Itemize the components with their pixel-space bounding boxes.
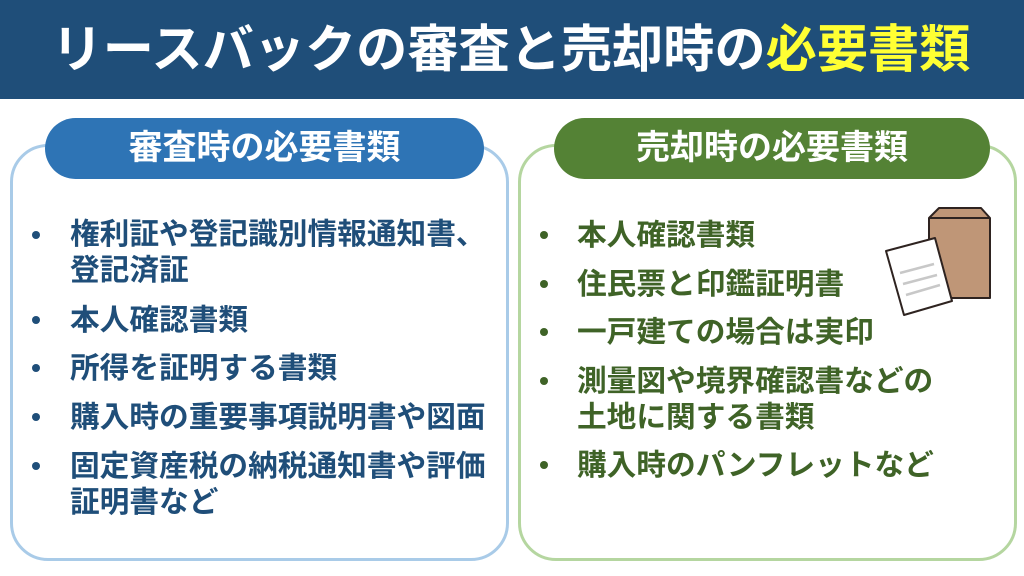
bullet item 5 (540, 461, 548, 469)
item 5 text: 購入時のパンフレットなど (577, 449, 934, 482)
bullet item 4 (32, 413, 40, 421)
heading: sale documents (554, 118, 990, 179)
item 4 continuation: 土地に関する書類 (577, 401, 814, 434)
item 3 text: 一戸建ての場合は実印 (577, 316, 874, 349)
item 1 continuation: 登記済証 (70, 254, 189, 287)
bullet item 4 (540, 377, 548, 385)
item 3 text: 所得を証明する書類 (70, 352, 337, 385)
bullet item 2 (540, 280, 548, 288)
bullet item 3 (32, 364, 40, 372)
item 5 text: 固定資産税の納税通知書や評価 (70, 450, 486, 483)
bullet item 2 (32, 316, 40, 324)
item 4 text: 測量図や境界確認書などの (577, 365, 933, 398)
item 1 text: 本人確認書類 (577, 219, 755, 252)
title banner: リースバックの審査と売却時の必要書類 (52, 21, 970, 78)
item 1 text: 権利証や登記識別情報通知書、 (70, 218, 486, 251)
heading: screening documents (45, 118, 484, 179)
panel: screening documents (10, 144, 509, 561)
list: screening documents (32, 218, 486, 519)
item 2 text: 本人確認書類 (70, 304, 248, 337)
bullet item 3 (540, 328, 548, 336)
bullet item 1 (540, 231, 548, 239)
heading: sale documents: 売却時の必要書類 (636, 129, 908, 167)
item 5 continuation: 証明書など (70, 486, 218, 519)
bullet item 1 (32, 231, 40, 239)
icon: envelope and document (885, 207, 991, 316)
item 2 text: 住民票と印鑑証明書 (577, 268, 844, 301)
item 4 text: 購入時の重要事項説明書や図面 (70, 401, 486, 434)
list: sale documents (540, 219, 934, 482)
bullet item 5 (32, 462, 40, 470)
heading: screening documents: 審査時の必要書類 (128, 129, 400, 167)
title banner (0, 0, 1024, 99)
panel: sale documents (518, 144, 1017, 561)
